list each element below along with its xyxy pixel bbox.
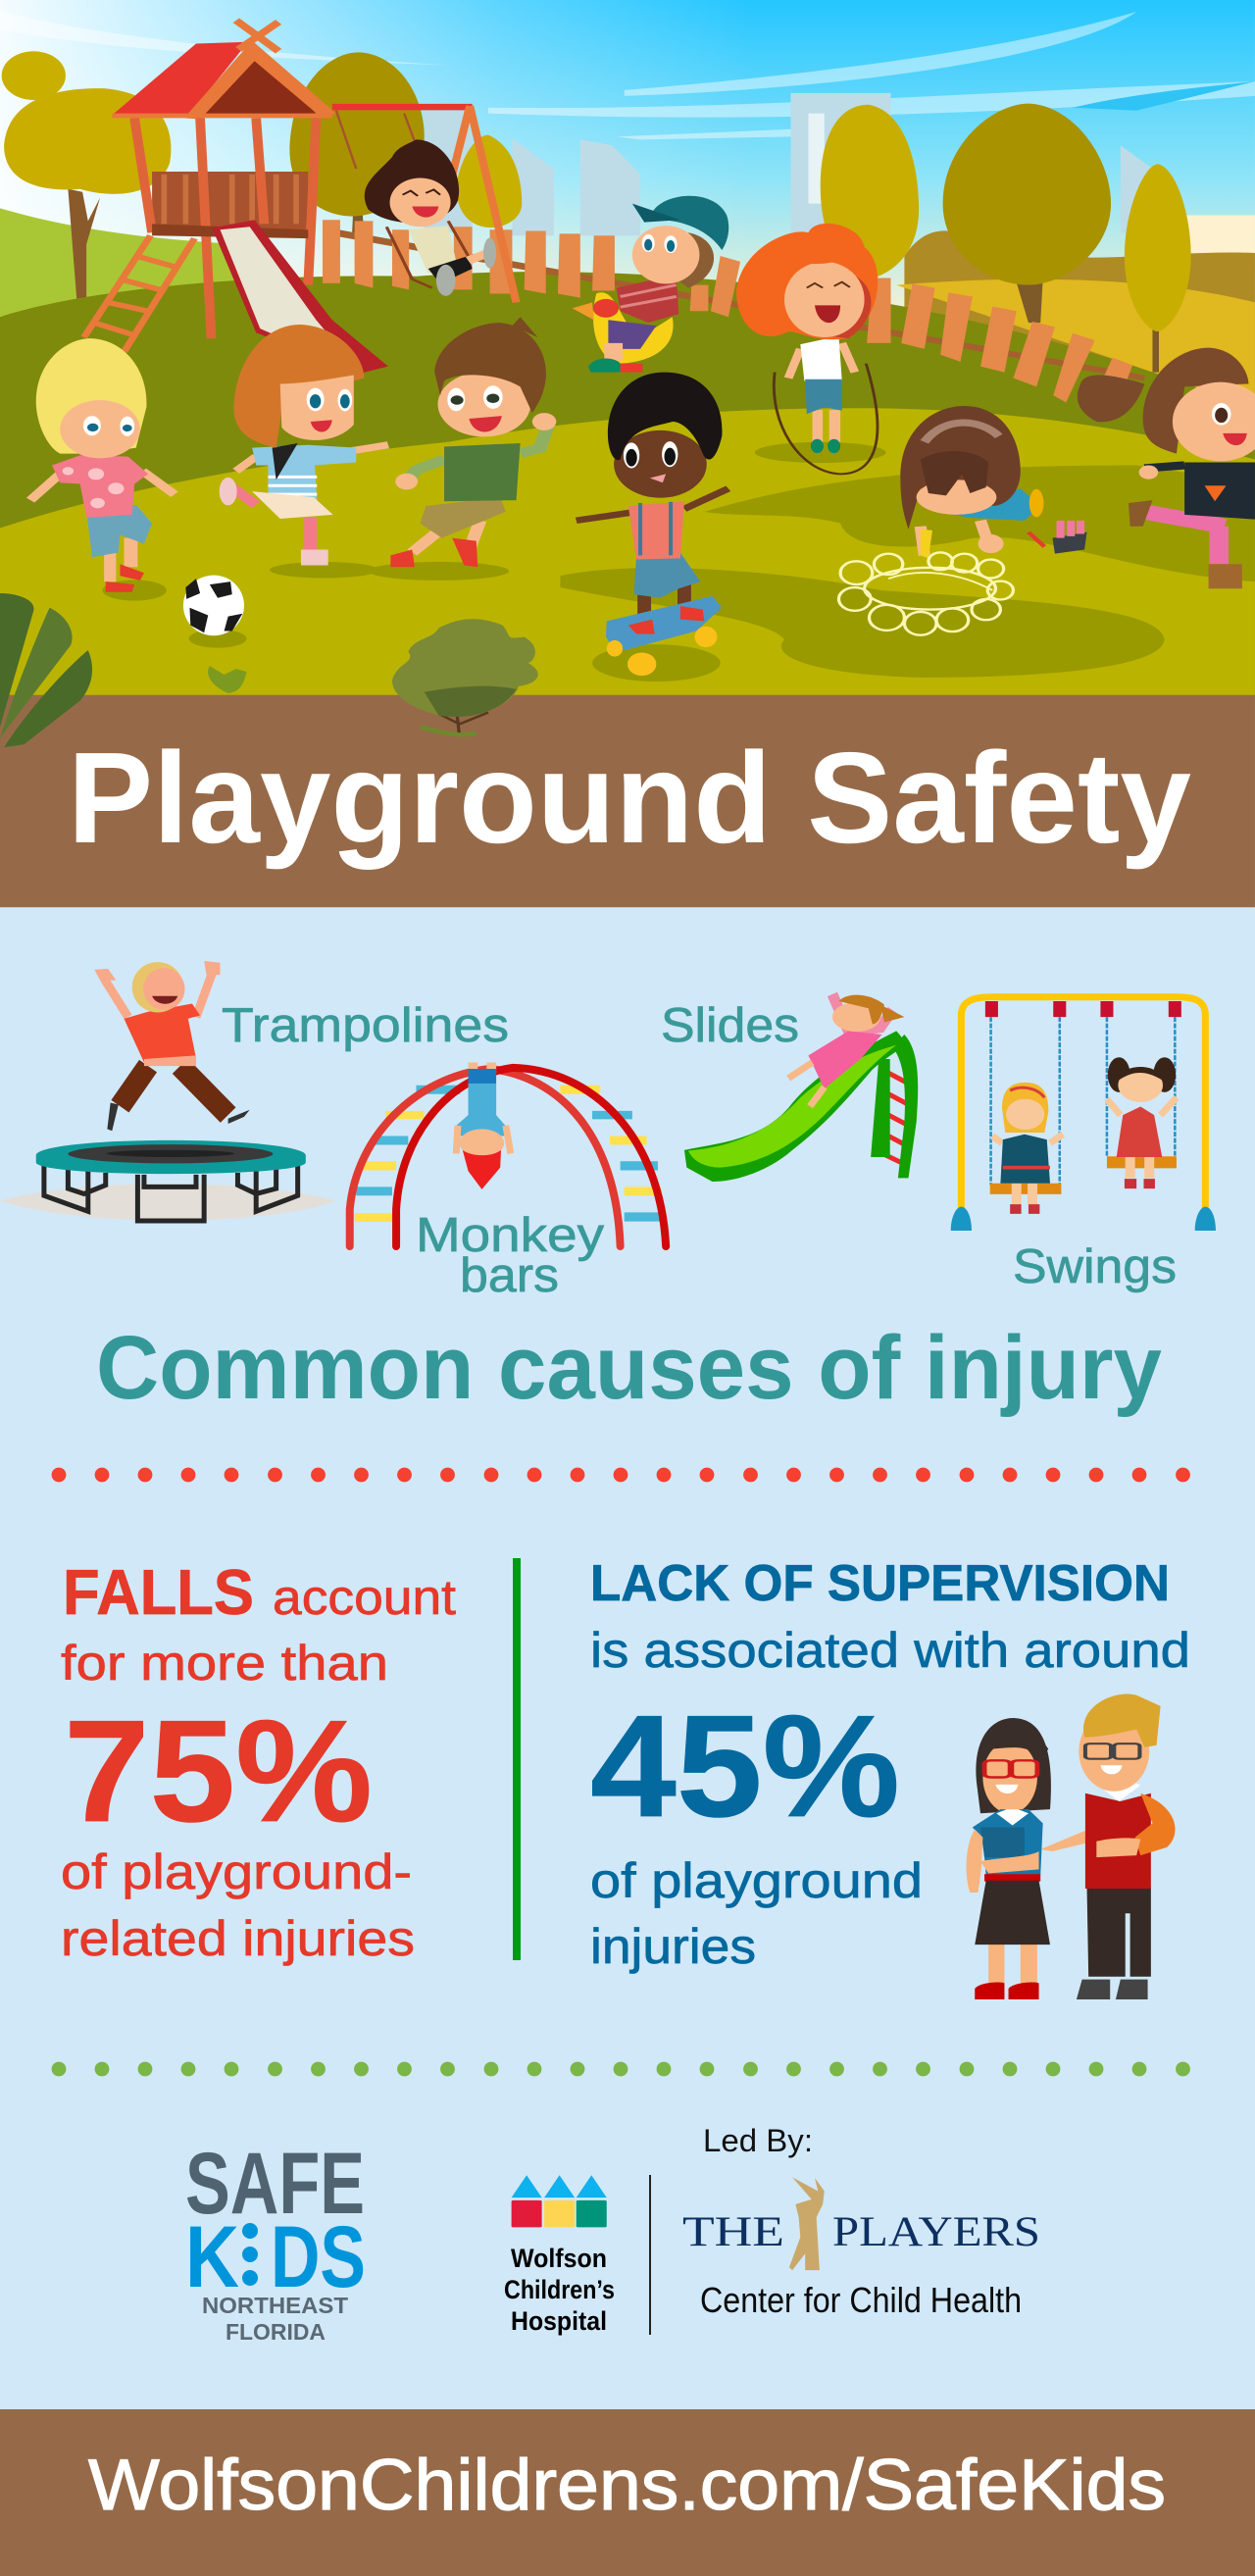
title: Playground Safety: [68, 726, 1191, 870]
chalk sun drawing: [838, 552, 1013, 635]
green vertical divider: [513, 1558, 521, 1960]
logo: Wolfson Children's Hospital: [504, 2175, 615, 2336]
stat panel: lack of supervision: is associated with around: [590, 1623, 1190, 1678]
leaf plant: [0, 593, 92, 747]
logo: Wolfson Children's Hospital: Hospital: [511, 2306, 607, 2336]
green slide with girl: [684, 994, 918, 1182]
logo: Safe Kids Northeast Florida: SAFE: [185, 2134, 365, 2232]
child on swing: [365, 139, 496, 296]
stat panel: falls: related injuries: [61, 1911, 415, 1966]
brown-haired boy in green: [390, 317, 556, 567]
two adult supervisors: [967, 1694, 1176, 1999]
trees: [2, 51, 1191, 373]
stat panel: falls: [61, 1556, 456, 1966]
logo: Safe Kids Northeast Florida: K: [185, 2207, 239, 2305]
logo: Wolfson Children's Hospital: Children’s: [504, 2275, 615, 2304]
stat panel: lack of supervision: 45%: [590, 1686, 900, 1847]
ground: [0, 272, 1255, 704]
stat panel: falls: of playground-: [61, 1844, 412, 1899]
brown title band: [0, 695, 1255, 907]
label: trampolines: Trampolines: [222, 999, 509, 1052]
logo: The Players Center for Child Health: [682, 2177, 1040, 2320]
stat panel: lack of supervision: of playground: [590, 1853, 923, 1908]
hero illustration: children on a playground: [0, 0, 1255, 907]
logo: The Players Center for Child Health: THE: [682, 2209, 784, 2255]
distant buildings: [425, 93, 1152, 235]
girl with orange bob: [220, 325, 388, 565]
logo: Wolfson Children's Hospital: Wolfson: [511, 2244, 607, 2273]
logo divider: [649, 2175, 651, 2335]
logo: The Players Center for Child Health: Center for Child Health: [700, 2280, 1022, 2320]
child with cap on rocking duck: [573, 196, 728, 373]
stat panel: lack of supervision: [590, 1555, 1190, 1974]
bush: [392, 619, 538, 735]
stat panel: lack of supervision: injuries: [590, 1919, 756, 1974]
wooden fence: [323, 220, 1144, 402]
label: slides: Slides: [661, 999, 799, 1052]
logo: The Players Center for Child Health: PLAYERS: [832, 2209, 1040, 2255]
monkey bars with hanging child: [350, 1063, 666, 1246]
label: monkey bars: [416, 1209, 605, 1302]
swing frame: [332, 106, 517, 302]
heading: common causes of injury: Common causes of injury: [96, 1318, 1162, 1418]
stat panel: lack of supervision: LACK OF SUPERVISION: [590, 1555, 1170, 1612]
logo: Safe Kids Northeast Florida: DS: [271, 2207, 366, 2305]
label: monkey bars: bars: [460, 1249, 559, 1302]
stat panel: falls: for more than: [61, 1636, 388, 1691]
stat panel: falls: 75%: [64, 1691, 373, 1852]
stat panel: falls: account: [273, 1570, 456, 1625]
small sprout: [208, 666, 246, 693]
blond boy: [30, 338, 175, 592]
footer band: [0, 2409, 1255, 2576]
girl with jump rope: [736, 224, 878, 474]
play house with slide: [84, 21, 388, 374]
red dotted divider: [52, 1468, 1190, 1482]
logo: Safe Kids Northeast Florida: FLORIDA: [226, 2319, 326, 2345]
stat panel: falls: FALLS: [63, 1556, 254, 1628]
soccer ball: [183, 576, 244, 635]
trampoline with jumping boy: [0, 961, 336, 1221]
girl drawing with chalk: [900, 406, 1087, 558]
text: led by: Led By:: [703, 2123, 813, 2158]
footer website address: WolfsonChildrens.com/SafeKids: [88, 2446, 1166, 2525]
running girl at right edge: [1078, 348, 1255, 588]
swing set with two girls: [951, 997, 1216, 1231]
green dotted divider: [52, 2062, 1190, 2076]
boy on skateboard: [577, 373, 728, 676]
logo: Safe Kids Northeast Florida: NORTHEAST: [202, 2293, 348, 2318]
label: monkey bars: Monkey: [416, 1209, 605, 1262]
label: swings: Swings: [1013, 1240, 1177, 1293]
logo: Safe Kids Northeast Florida: [185, 2134, 366, 2345]
